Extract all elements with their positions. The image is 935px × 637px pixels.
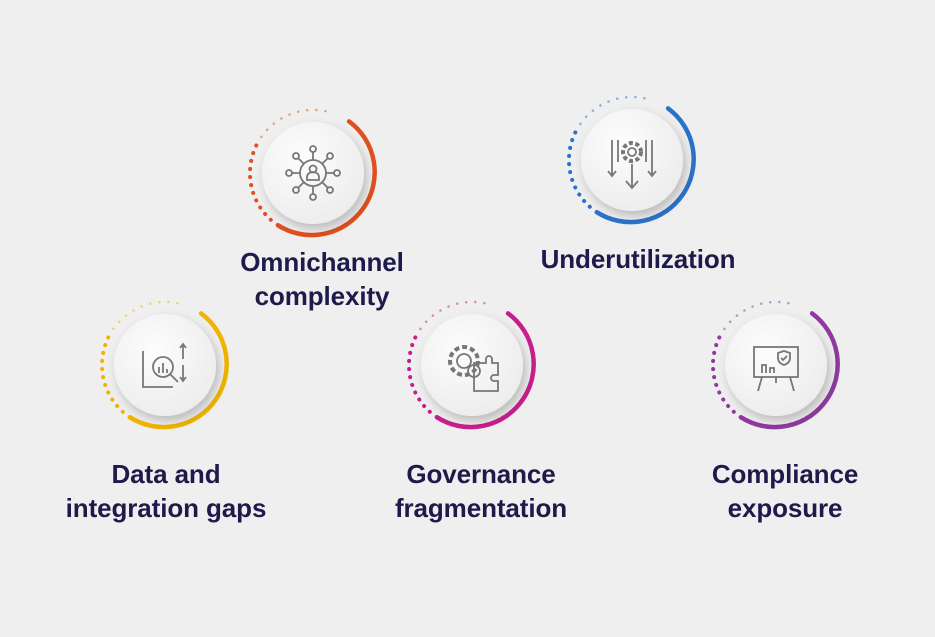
label: Omnichannel complexity: complexity: [255, 281, 389, 311]
label: Underutilization: Underutilization: [541, 244, 735, 274]
icon: gear with down arrows: [608, 140, 656, 188]
label: Compliance exposure: [712, 459, 858, 523]
icon: puzzle gears: [450, 347, 498, 391]
item: Data and integration gaps: [102, 302, 227, 427]
item: Governance fragmentation: [409, 302, 534, 427]
label: Omnichannel complexity: Omnichannel: [240, 247, 404, 277]
label: Governance fragmentation: fragmentation: [395, 493, 567, 523]
item: Underutilization: [569, 97, 694, 222]
label: Compliance exposure: Compliance: [712, 459, 858, 489]
icon: network person: [286, 146, 340, 200]
icon: chart magnifier: [143, 344, 186, 387]
label: Data and integration gaps: Data and: [111, 459, 220, 489]
icon: board with shield: [754, 347, 798, 391]
label: Data and integration gaps: integration gaps: [66, 493, 266, 523]
label: Compliance exposure: exposure: [728, 493, 842, 523]
label: Governance fragmentation: Governance: [406, 459, 556, 489]
item: Omnichannel complexity: [250, 110, 375, 235]
label: Omnichannel complexity: [240, 247, 404, 311]
item: Compliance exposure: [713, 302, 838, 427]
label: Governance fragmentation: [395, 459, 567, 523]
label: Data and integration gaps: [66, 459, 266, 523]
